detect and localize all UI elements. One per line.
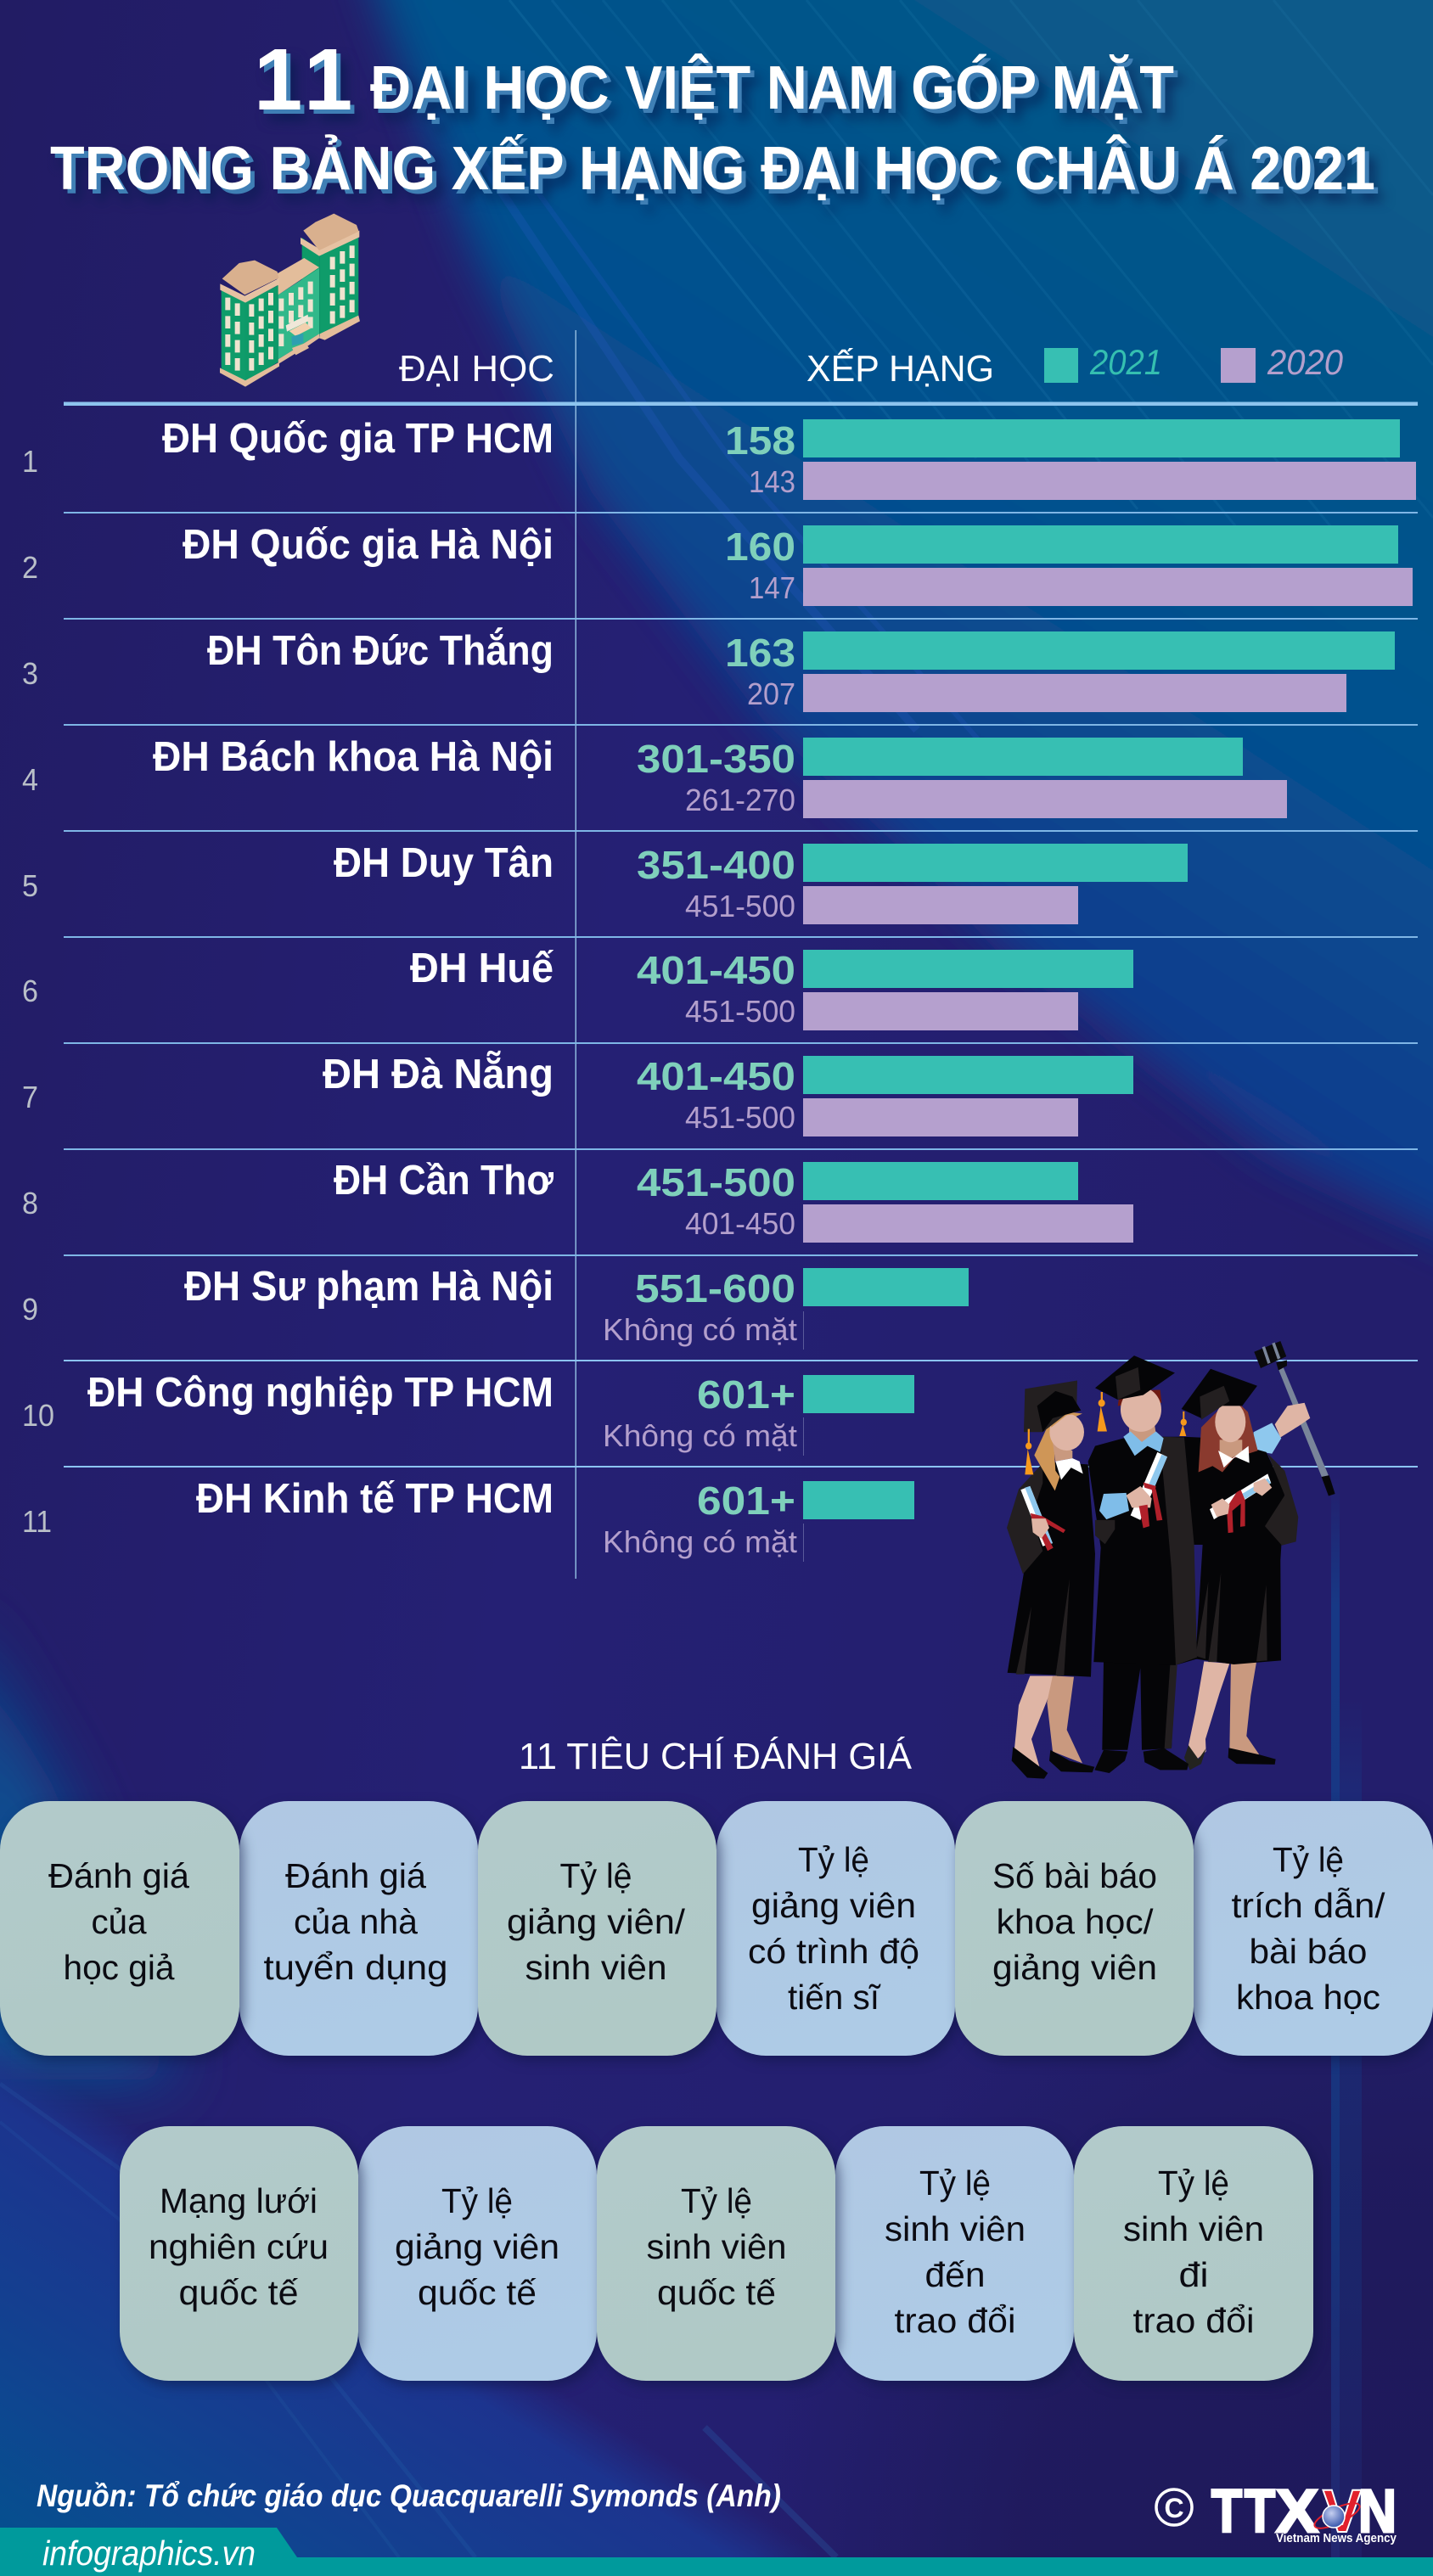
row 3: 207 [747,676,795,711]
card: outbound exchange students: sinh viên [1123,2209,1264,2248]
card: international students: quốc tế [657,2273,776,2312]
row 10: ĐH Công nghiệp TP HCM [87,1370,554,1416]
row 11: ĐH Kinh tế TP HCM [196,1476,554,1522]
row 4: 4 [22,762,38,797]
title: 1 [304,31,352,128]
card: inbound exchange students: sinh viên [885,2209,1026,2248]
card: outbound exchange students: trao đổi [1132,2301,1255,2340]
footer band: infographics.vn [42,2534,256,2573]
row 8: 401-450 [685,1206,795,1241]
card: employer reputation: Đánh giá [285,1856,426,1895]
card: international students [597,2126,835,2381]
card: citations per paper: trích dẫn/ [1231,1886,1385,1925]
row 9 [22,1264,969,1350]
row 2: 147 [749,570,795,605]
row 10: 601+ [697,1372,795,1417]
card: outbound exchange students: Tỷ lệ [1158,2164,1229,2203]
card: inbound exchange students: Tỷ lệ [919,2164,991,2203]
card: employer reputation [239,1801,478,2056]
row 7: 451-500 [685,1100,795,1135]
card: citations per paper: khoa học [1236,1978,1380,2017]
row 9: Không có mặt [603,1312,797,1347]
row 2 [22,522,1413,606]
card: papers per faculty: Số bài báo [992,1856,1157,1895]
row 6: ĐH Huế [410,946,554,991]
row 9: 9 [22,1292,38,1327]
right graduate [1179,1369,1310,1770]
card: international research network: quốc tế [178,2273,299,2312]
card: academic reputation: của [92,1902,147,1941]
card: faculty with PhD: Tỷ lệ [798,1840,869,1879]
icon: university building [220,214,360,387]
row 10: 10 [22,1398,54,1433]
card: outbound exchange students: đi [1178,2255,1209,2294]
card: outbound exchange students [1074,2126,1313,2381]
row 9: 551-600 [635,1266,795,1310]
card: inbound exchange students: trao đổi [895,2301,1015,2340]
row 11: Không có mặt [603,1524,797,1559]
illustration: graduates taking a selfie [1007,1341,1335,1779]
logo: TTXVN [1211,2478,1397,2545]
row 2: 160 [725,525,795,569]
column label: university: ĐẠI HỌC [399,348,554,390]
title: 1 [254,31,302,128]
row 7 [22,1051,1133,1136]
card: faculty student ratio: Tỷ lệ [560,1856,632,1895]
card: academic reputation [0,1801,239,2056]
row 1: 1 [22,444,38,479]
row 4: ĐH Bách khoa Hà Nội [153,734,554,780]
card: faculty student ratio: sinh viên [525,1948,667,1987]
card: faculty student ratio [478,1801,716,2056]
icon: copyright mark [1156,2489,1192,2525]
logo: TTXVN: T [1211,2478,1242,2545]
card: international students: sinh viên [647,2227,786,2266]
row 11: 11 [22,1504,52,1539]
row 5: 5 [22,868,38,903]
row 6: 451-500 [685,994,795,1029]
row 9: ĐH Sư phạm Hà Nội [184,1264,554,1310]
row 7: ĐH Đà Nẵng [323,1051,554,1097]
card: inbound exchange students [835,2126,1074,2381]
table header [399,342,1344,390]
selfie stick [1254,1341,1335,1496]
card: faculty student ratio: giảng viên/ [507,1902,686,1941]
card: faculty with PhD [716,1801,955,2056]
row 3: 3 [22,656,38,691]
card: academic reputation: học giả [63,1948,175,1987]
card: employer reputation: của nhà [294,1902,418,1941]
heading: 11 evaluation criteria: 11 TIÊU CHÍ ĐÁNH GIÁ [519,1736,913,1777]
logo: TTXVN: X [1276,2478,1318,2545]
title [50,31,1375,203]
left graduate [1007,1381,1095,1779]
row 5: ĐH Duy Tân [334,840,554,886]
logo: TTXVN: T [1245,2478,1275,2545]
card: international faculty: Tỷ lệ [441,2181,513,2220]
row 10 [22,1370,914,1456]
row 6 [22,946,1133,1030]
icon: copyright mark: C [1164,2493,1184,2523]
source note: Nguồn: Tổ chức giáo dục Quacquarelli Symonds (Anh) [37,2478,781,2513]
row 1: 158 [725,418,795,463]
table rules [64,330,1418,1579]
row 10: Không có mặt [603,1418,797,1453]
card: international students: Tỷ lệ [681,2181,752,2220]
legend: 2020 [1221,342,1344,383]
row 1: ĐH Quốc gia TP HCM [162,416,554,462]
logo: TTXVN: V [1323,2478,1362,2545]
row 8: ĐH Cần Thơ [334,1158,554,1204]
row 1: 143 [749,464,795,499]
card: citations per paper [1194,1801,1433,2056]
card: inbound exchange students: đến [925,2255,985,2294]
card: international research network [120,2126,358,2381]
card: international research network: Mạng lưới [160,2181,318,2220]
row 3: 163 [725,631,795,675]
card: faculty with PhD: có trình độ [748,1932,919,1971]
row 8: 8 [22,1186,38,1221]
card: employer reputation: tuyển dụng [263,1948,448,1987]
row 7: 7 [22,1080,38,1114]
row 11 [22,1476,914,1562]
card: papers per faculty: khoa học/ [997,1902,1154,1941]
row 7: 401-450 [637,1054,795,1098]
row 6: 6 [22,974,38,1008]
card: papers per faculty [955,1801,1194,2056]
row 3 [22,627,1395,712]
card: papers per faculty: giảng viên [992,1948,1157,1987]
legend: 2020: 2020 [1267,342,1344,382]
footer band [0,2528,1433,2576]
card: international research network: nghiên cứu [149,2227,329,2266]
card: citations per paper: bài báo [1250,1932,1367,1971]
row 5: 451-500 [685,889,795,923]
centre graduate [1088,1355,1197,1773]
row 8: 451-500 [637,1160,795,1204]
row 11: 601+ [697,1479,795,1523]
card: faculty with PhD: giảng viên [751,1886,916,1925]
card: international faculty: quốc tế [418,2273,537,2312]
row 4: 301-350 [637,737,795,781]
card: faculty with PhD: tiến sĩ [788,1978,881,2017]
row 4: 261-270 [685,783,795,817]
row 1 [22,416,1416,500]
column label: ranking: XẾP HẠNG [806,347,994,390]
card: international faculty: giảng viên [395,2227,559,2266]
legend: 2021: 2021 [1089,342,1162,382]
row 5 [22,840,1188,924]
row 4 [22,734,1287,818]
card: citations per paper: Tỷ lệ [1273,1840,1344,1879]
title: ĐẠI HỌC VIỆT NAM GÓP MẶT [370,53,1174,122]
logo: TTXVN: N [1358,2478,1396,2545]
row 2: ĐH Quốc gia Hà Nội [183,522,554,568]
logo: TTXVN: Vietnam News Agency [1276,2531,1397,2545]
row 2: 2 [22,550,38,585]
legend: 2021 [1044,342,1162,383]
row 8 [22,1158,1133,1243]
card: academic reputation: Đánh giá [48,1856,189,1895]
row 5: 351-400 [637,843,795,887]
row 3: ĐH Tôn Đức Thắng [207,627,554,674]
card: international faculty [358,2126,597,2381]
row 6: 401-450 [637,948,795,992]
